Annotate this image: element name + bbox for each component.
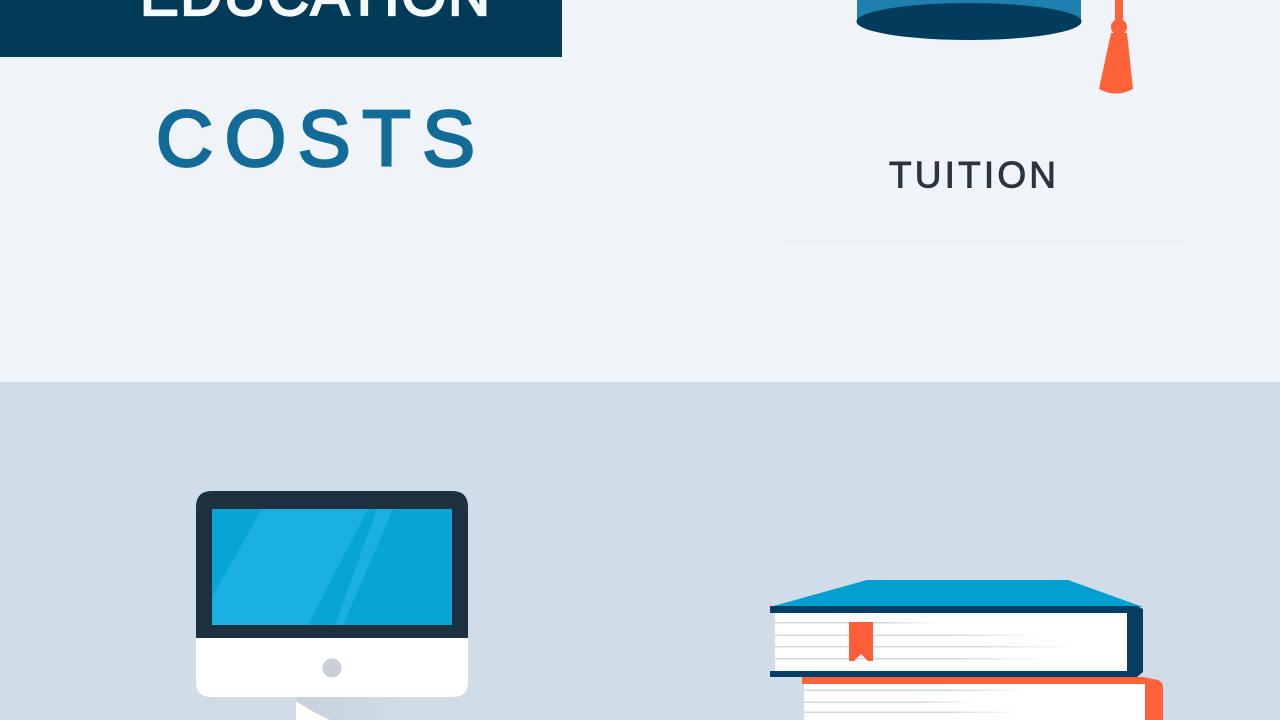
icon: graduation cap xyxy=(856,0,1133,94)
monitor button xyxy=(322,658,342,678)
upper book xyxy=(770,580,1143,677)
icon: stacked books xyxy=(770,580,1163,720)
title banner: education xyxy=(0,0,562,57)
panel: bottom background xyxy=(0,382,1280,720)
lower book xyxy=(802,677,1163,720)
tassel xyxy=(1099,0,1133,94)
icon: desktop computer xyxy=(196,491,468,720)
heading: costs: COSTS xyxy=(156,94,475,182)
monitor stand xyxy=(296,697,400,720)
monitor screen xyxy=(212,509,452,625)
bookmark xyxy=(849,622,873,661)
panel: top background xyxy=(0,0,1280,382)
monitor bezel xyxy=(196,491,468,638)
label: tuition: TUITION xyxy=(889,155,1056,196)
monitor chin xyxy=(196,636,468,697)
